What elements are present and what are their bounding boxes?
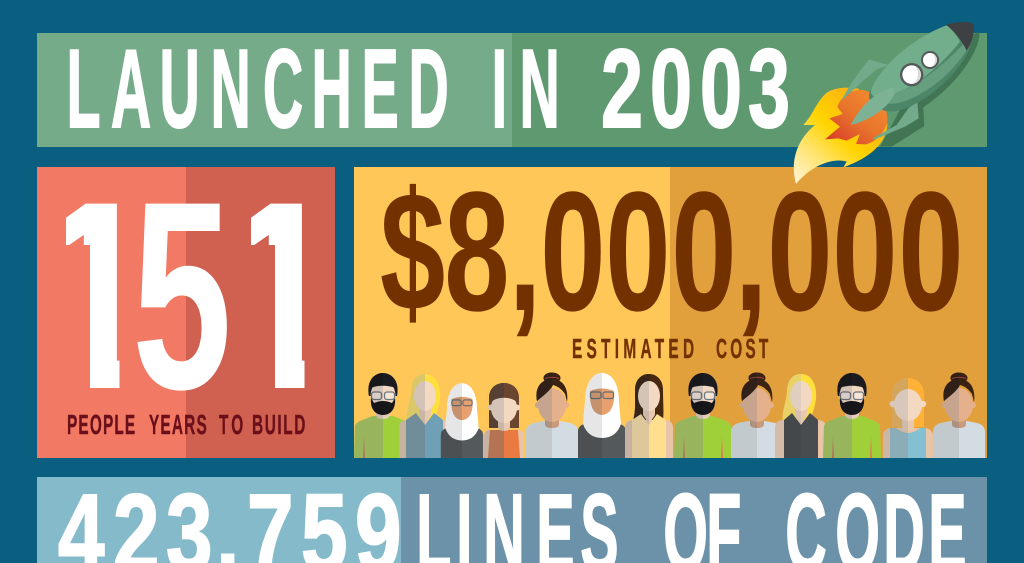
big number cost: $8,000,000 xyxy=(380,156,964,346)
person 1 xyxy=(354,373,412,458)
porthole large xyxy=(900,63,923,86)
person 5 xyxy=(526,372,578,458)
title: launched in 2003 xyxy=(67,27,790,152)
person 10 xyxy=(775,374,826,458)
title: launched in 2003: 2003 xyxy=(601,28,790,152)
big number 151 xyxy=(66,204,304,391)
big number 151: 1 xyxy=(212,146,347,446)
panel: estimated cost xyxy=(354,156,987,458)
person 6 xyxy=(578,373,626,458)
big number 151: 1 xyxy=(28,146,162,446)
people row xyxy=(354,372,985,458)
caption: people years to build: TO xyxy=(219,409,243,440)
rocket body xyxy=(869,25,974,111)
upper fin xyxy=(842,59,888,101)
lower fin xyxy=(873,102,919,139)
rocket nose xyxy=(946,22,974,51)
caption: estimated cost xyxy=(572,333,768,364)
person 8 xyxy=(674,373,732,458)
person 9 xyxy=(731,372,783,458)
caption: people years to build xyxy=(67,409,305,440)
panel: lines of code xyxy=(37,472,987,563)
person 3 xyxy=(441,383,483,458)
big number 151: 5 xyxy=(132,147,232,446)
person 11 xyxy=(823,373,881,458)
flame xyxy=(794,88,887,184)
fireball xyxy=(825,90,887,144)
panel: people years xyxy=(37,167,335,458)
caption: people years to build: PEOPLE xyxy=(67,409,135,440)
panel: launched banner xyxy=(37,27,987,152)
caption: estimated cost: COST xyxy=(716,333,768,364)
title: launched in 2003: LAUNCHED IN xyxy=(67,27,560,151)
person 13 xyxy=(933,372,985,458)
caption: people years to build: YEARS xyxy=(149,409,207,440)
icon: rocket xyxy=(794,22,979,184)
person 12 xyxy=(883,378,933,458)
porthole small xyxy=(921,51,939,69)
rocket shadow xyxy=(880,33,979,147)
person 2 xyxy=(399,374,450,458)
person 4 xyxy=(484,383,524,458)
person 7 xyxy=(625,374,673,458)
caption: people years to build: BUILD xyxy=(252,409,305,440)
caption: estimated cost: ESTIMATED xyxy=(572,333,694,364)
center fin xyxy=(851,87,895,125)
